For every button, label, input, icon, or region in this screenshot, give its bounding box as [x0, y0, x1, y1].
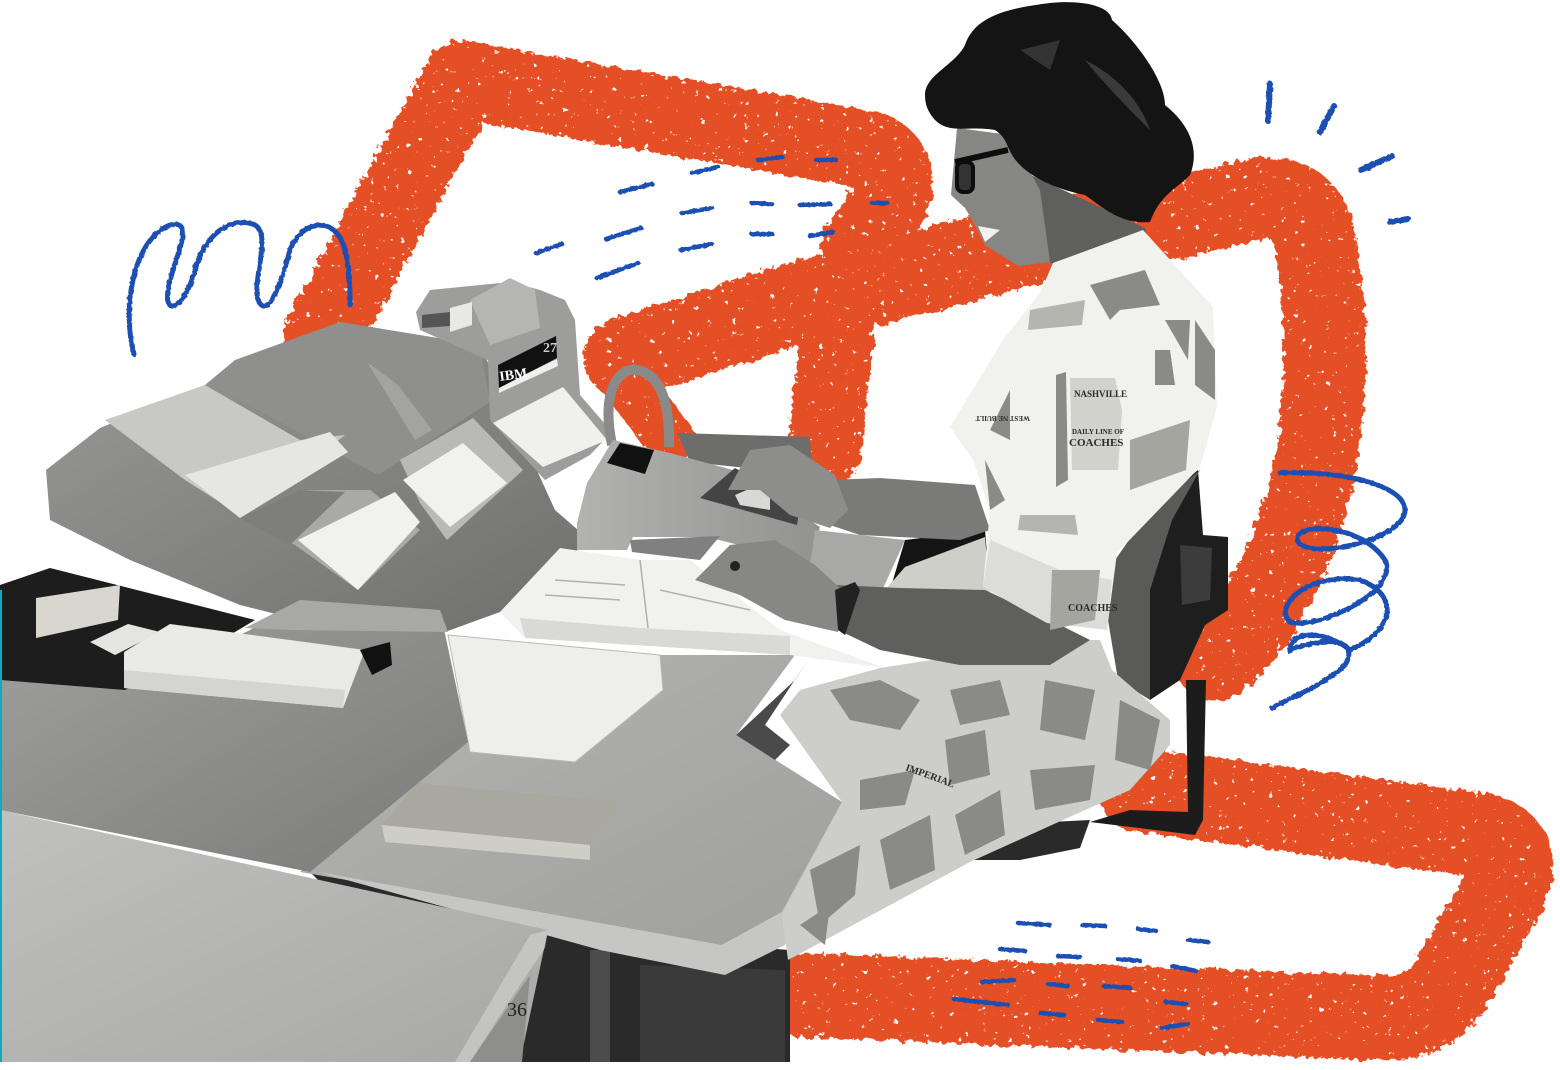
spark marks upper right: [1268, 84, 1408, 222]
paper stack on desk: [448, 635, 663, 762]
front grey table: 36: [507, 999, 527, 1021]
glasses: [955, 150, 1008, 192]
card reader with IBM badge: [416, 278, 612, 480]
cyan edge line: [0, 590, 2, 1062]
dress lettering: COACHES: [1068, 603, 1118, 614]
card reader with IBM badge: IBM: [498, 366, 528, 385]
skirt: [780, 640, 1170, 960]
dress lettering: DAILY LINE OF: [1072, 428, 1124, 436]
upper forearm: [830, 478, 990, 540]
watch: [835, 582, 860, 635]
chair: [968, 470, 1228, 860]
smile: [978, 226, 1000, 242]
woman: [695, 2, 1217, 960]
neck: [1010, 170, 1147, 265]
dress lettering: COACHES: [1069, 437, 1123, 449]
squiggle top left: [129, 222, 350, 354]
card reader with IBM badge: 27: [543, 341, 557, 356]
punch card tray: [298, 492, 420, 590]
left box machine: [0, 568, 468, 872]
skirt motifs: [830, 680, 920, 730]
front grey table: [0, 810, 548, 1062]
dress motifs: [800, 270, 1215, 945]
writing hand: [695, 540, 842, 632]
dress lettering: IMPERIAL: [904, 762, 956, 790]
dress lettering: NASHVILLE: [1074, 389, 1127, 399]
desk surface right of calculator: [810, 530, 905, 595]
hair: [925, 2, 1194, 222]
face: [951, 128, 1050, 266]
lower arm: [835, 585, 1090, 665]
dress lettering: WEST NE BUILT: [975, 414, 1030, 422]
paper feed left: [105, 385, 345, 515]
blouse: [950, 230, 1217, 630]
sleeve cuff shadow: [983, 540, 1112, 630]
L-shaped desk: [300, 655, 842, 1062]
orange crayon scribble: [322, 80, 1511, 1018]
main IBM machine: [46, 322, 578, 632]
shadow behind lap: [890, 530, 990, 590]
index card stack: [124, 624, 365, 708]
dashes lower: [954, 923, 1208, 1028]
ring: [730, 561, 740, 571]
typing hand: [728, 445, 848, 528]
wooden block: [382, 783, 620, 860]
dashes upper: [536, 157, 887, 278]
machine lid: [207, 322, 490, 475]
dress lettering: [904, 389, 1127, 790]
lap fabric: [885, 537, 990, 592]
handle: [609, 370, 669, 447]
papers under hand: [500, 548, 885, 668]
calculator: [577, 370, 820, 563]
spiral right: [1272, 473, 1405, 708]
blue scribbles: [129, 84, 1408, 1028]
